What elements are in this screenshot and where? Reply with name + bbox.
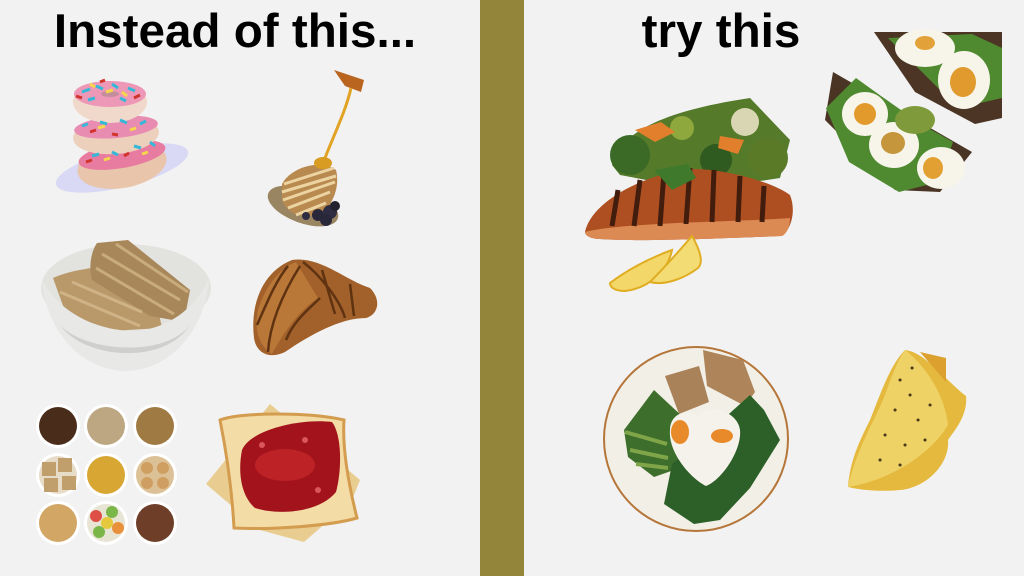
- heading: instead of this: Instead of this...: [54, 5, 416, 58]
- food: plate with poached egg, greens and toast: [604, 347, 788, 531]
- food: omelette: [848, 350, 966, 491]
- food: grilled salmon with vegetables and lemon: [585, 98, 793, 291]
- heading: try this: try this: [642, 5, 800, 58]
- food: pancakes with syrup: [262, 70, 364, 235]
- center divider bar: [480, 0, 524, 576]
- food: bowl of wheat biscuits: [41, 240, 211, 371]
- food: nine cereal bowls: [36, 404, 177, 545]
- food: toast with jam: [206, 404, 360, 542]
- food: stacked donuts on plate: [51, 80, 193, 203]
- food: croissant: [253, 260, 377, 355]
- food: avocado egg toast: [825, 29, 1002, 192]
